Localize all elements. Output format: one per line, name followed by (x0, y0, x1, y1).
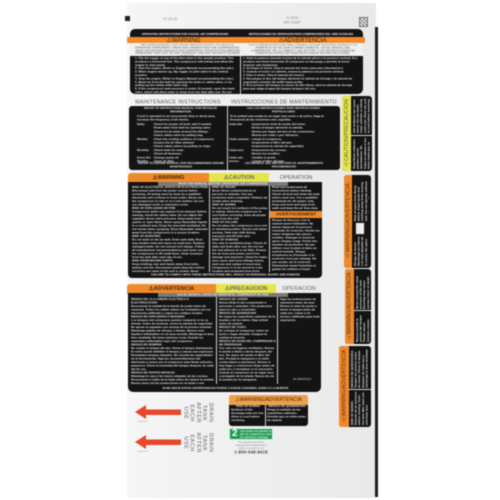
heading: instrucciones de mantenimiento: INSTRUCCIONES DE MANTENIMIENTO (231, 100, 337, 105)
operation header: OPERATION (280, 174, 312, 180)
drain text upper: TANK (202, 405, 208, 421)
column 2 text: Do not place the compressor on a roof or elevated position. Secure unit when moving. Tank may shift during transport and lift with care. (212, 224, 267, 238)
column 1 text: Disconnect unit from the power source before servicing. All wiring must be done by a qualified electrician and conform to local codes. Never use the compressor in rain or on a wet surface. Do not use damaged cords or extension cords. (132, 190, 204, 206)
arrow code lower: 34-0000721 (138, 450, 148, 452)
panel: risk of burns label (228, 394, 309, 427)
Spanish schedule labels: Cada mes: (229, 149, 244, 152)
column 2 text: RISK OF INJURY (212, 186, 236, 189)
column 1 text: RIESGO DE LA LLAMBRE ELECTRICA O ELECTROCUCION (131, 298, 189, 304)
Spanish schedule tasks: -Inspeccione las correas. (251, 149, 287, 152)
column 1 text: RIESGO DE EXPLOSION O INCENDIO (131, 316, 185, 318)
main panel body (128, 182, 322, 278)
column 1 text: Desconecte la unidad de la fuente de poder antes de repararla. Todos los cables deben ser instalados por un electricista calificado y segun los codigos locales. (131, 305, 210, 315)
Spanish maintenance footer: LEA MANUAL DEL MOTOR PARA EL MANTENIMIENTO RECOMENDADO (245, 162, 323, 168)
black backing frame (130, 29, 363, 94)
caution header (209, 173, 269, 183)
drain text upper: DRAIN (208, 403, 214, 423)
Spanish maintenance overview: Si la unidad esta usada en un lugar muy sucio o de polvo, haga la frecuencia de las revisiones mas seguidas. (230, 115, 324, 121)
column divider (268, 186, 271, 272)
badge number: 2 (232, 428, 238, 439)
barcode icon (359, 17, 368, 27)
drain text lower (183, 432, 214, 453)
English schedule tasks: -Check belts for wear. (153, 149, 184, 152)
divider between steps (239, 56, 242, 94)
precaucion header: ⚠PRECAUCION (225, 286, 267, 292)
English schedule tasks: -Check for air leaks around the fittings. (153, 130, 209, 133)
middle divider (354, 309, 371, 312)
caution strip (342, 96, 351, 171)
contact text: Use genuine replacement (236, 444, 266, 447)
badge text: Use motor oil specific to this air compressor only for warranty coverage (240, 430, 271, 439)
drain text lower: AFTER (195, 433, 201, 453)
label body (229, 395, 308, 426)
column 3 text: Siga las instrucciones de operacion antes de usar. Revise el nivel de aceite y drene el tanque antes de cada uso. Llame a un tecnico calificado para toda reparacion. (280, 298, 320, 322)
column 2 text: RIESGO DE DANO DEL COMPRESOR O DE PROPIEDAD (219, 340, 276, 346)
English schedule tasks: -Check safety valves by pulling on rings. (153, 145, 211, 148)
steps English: 4. Stop the engine. (Refer to Engine Manual recommending this info.) (135, 77, 234, 80)
caution header: ⚠CAUTION (224, 174, 254, 180)
caution divider (351, 134, 372, 137)
drain text lower: EACH (189, 434, 195, 452)
column 1 text: Do not weld on the air tank. Drain tank daily. Rust may weaken tank and cause an explosion. Replace damaged tanks. Do not exceed tool ratings. Follow all manufacturer recommendations and never use the compressor to fill small items. Drain moisture from the tank after each day of use. (132, 238, 205, 259)
panel top title: READ THE MANUAL BEFORE OPERATING AIR COMPRESSOR (178, 182, 268, 186)
heading: operating instructions English: OPERATING INSTRUCTIONS FOR GAS/OIL AIR COMPRESSORS (142, 33, 228, 36)
Spanish schedule labels (228, 122, 250, 163)
English maintenance overview: If unit is operated in an excessively dirty or dusty area, increase the frequency of all checks. (137, 115, 215, 121)
column 2 text (211, 185, 268, 273)
column 2 text: RIESGO DE LESION (219, 298, 248, 301)
Spanish schedule labels: Cada dia: (229, 123, 243, 126)
column 1 text: RISK OF EXPLOSION OR FIRE (132, 207, 176, 210)
avertissement band: AVERTISSEMENT (276, 212, 316, 217)
white warning section (130, 43, 363, 56)
orange strip (339, 346, 349, 427)
steps Spanish: 4. Pare el motor. (Vea el manual del motor.) (243, 74, 304, 77)
Spanish schedule tasks: -Drene el tanque abriendo la valvula. (251, 127, 303, 130)
orange strip (345, 269, 354, 344)
column 2 text: Nunca dirija el aire comprimido a personas o animales. Use proteccion para los ojos y respirador. (219, 302, 272, 312)
Spanish panel body (128, 293, 321, 392)
Spanish schedule tasks (250, 122, 316, 163)
English maintenance footer: REFER TO ENGINE MANUAL FOR RECOMMENDED ENGINE MAINTENANCE (138, 162, 224, 168)
panel footer: FAILURE TO COMPLY WITH THESE INSTRUCTIONS WILL RESULT IN PERSONAL INJURY AND DAMAGE (151, 274, 300, 276)
drain text upper (183, 402, 214, 423)
Spanish schedule tasks: -Limpie el compresor. (251, 138, 282, 141)
Spanish schedule tasks: -Cambie el aceite. (251, 156, 276, 159)
part number: 34-0000721A (293, 378, 311, 381)
panel: main warning Spanish (126, 283, 322, 393)
English schedule tasks: -Change pump oil. (153, 156, 179, 159)
print code left: 97-15-15 (163, 18, 177, 21)
warning title: ⚠WARNING/ADVERTENCIA (345, 183, 351, 260)
Spanish schedule tasks: -Inspeccione la valvula de seguridad. (251, 145, 304, 148)
panel footer: SI NO SIGUE ESTAS ADVERTENCIAS PUEDE CAUSAR LESIONES, DANO O LA MUERTE (162, 387, 289, 390)
contact text: For service and parts (238, 441, 264, 444)
drain text upper: AFTER (195, 403, 201, 423)
Spanish schedule labels: Cada seis (229, 156, 243, 159)
panel: maintenance (129, 106, 340, 170)
label orange header (229, 395, 308, 405)
English schedule tasks: -Inspect the air filter element. (153, 142, 195, 145)
precaucion header (216, 284, 276, 294)
warning band (127, 37, 365, 43)
English maintenance intro: REFER TO INSTRUCTION MANUAL FOR DETAILED INFORMATION (144, 107, 217, 113)
steps Spanish (242, 56, 358, 91)
English schedule tasks: -Clean the cooling surfaces of compressor. (153, 138, 215, 141)
Spanish maintenance intro: LEA LAS INSTRUCCIONES PARA INSTRUCCIONES PARTICULARES (247, 107, 320, 113)
column 1 text (131, 185, 208, 273)
column 1 text: No suelde el tanque del aire. Drene el tanque diariamente. El oxido puede debilitar el tanque y causar una explosion. Reemplace tanques danados. No exceda las capacidades de la herramienta. Siga las recomendaciones del fabricante y nunca use el compresor para llenar articulos pequenos. Drene la humedad del tanque despues de cada dia de uso. (131, 347, 214, 371)
arrow: lower drain (134, 434, 182, 450)
print code right (283, 16, 301, 24)
column 1 text: RIESGO DE ROMPER (131, 344, 162, 346)
English schedule labels (136, 122, 151, 163)
drain text lower: DRAIN (208, 433, 214, 453)
label orange header: ⚠WARNING/ADVERTENCIA (235, 397, 302, 402)
green certification badge (229, 428, 273, 440)
risk of burns text: Surfaces of the discharge tube are hot. Allow to cool before servicing. (231, 408, 264, 422)
heading: operating instructions Spanish: INSTRUCCIONES DE OPERACION PARA COMPRESORES DEL AIRE GASOLINA (249, 33, 353, 36)
panel top title: LEA EL MANUAL ANTES DE OPERAR EL COMPRESOR DE AIRE (177, 294, 269, 296)
warning title: ⚠WARNING/ADVERTENCIA (341, 350, 347, 423)
English schedule tasks: -Drain water from tank by opening valve. (153, 127, 211, 130)
steps English: 3. When engine warms up, flip toggle on pilot valve to the vertical position. (135, 71, 228, 77)
panel top title (158, 293, 288, 297)
English schedule tasks (152, 122, 215, 163)
column 2 text: RISK OF DAMAGE (212, 238, 238, 242)
column 2 text: RIESGO DE QUEMADURA (219, 312, 256, 315)
English schedule labels: Monthly: (137, 149, 150, 152)
maintenance divider (226, 106, 229, 170)
column 2 text: Use solo en lugares ventilados. Revise el aceite a diario y drene despues del uso. No opere sin aceite ni filtro del aire. Proteja la manguera y el cable contra danos y pinchazos. Revise si hay fugas y conexiones flojas antes de cada uso y reemplace si es necesario. Guarde el compresor en un lugar seco y protegido de la helada. Nunca tire de la unidad por la manguera. (219, 347, 275, 382)
English schedule labels: Weekly: (137, 138, 148, 141)
column 2 text: RIESGO DE CAIDA (219, 326, 246, 329)
English schedule tasks: -Check for proper oil level, add if needed. (153, 123, 212, 126)
steps Spanish: 5. Descargue el aire del tanque abriendo la valvula de drenaje o la valvula de seguridad y tirando del anillo hacia arriba. (243, 77, 352, 84)
side label: warning advertencia lower (339, 346, 371, 427)
column 1 text (130, 297, 214, 385)
column divider (215, 297, 218, 384)
steps English: 5. Bleed air from the tank by opening the drain or safety valve, or by pulling up the safety relief valve ring. (135, 81, 232, 87)
side label: caution precaucion (342, 96, 372, 171)
English schedule tasks: -Check safety valve by pulling ring. (153, 134, 203, 137)
arrow code upper: 34-0000721 (138, 420, 148, 422)
English schedule labels: Daily: (137, 123, 145, 126)
riesgo text: Tenga el cuidado de las superficies calientes. Permita que se enfrie antes de reparar. (267, 408, 306, 422)
column 1 text: RISK OF BURSTING (132, 235, 161, 238)
drain text lower: USE (183, 437, 189, 449)
Spanish schedule tasks: -Inspeccione el filtro del aire. (251, 142, 292, 145)
steps English: 2. Start the engine. (Refer to Engine Manual recommending this info.) (135, 67, 234, 70)
contact text (235, 440, 267, 450)
column 2 text: RISK OF FALLING (212, 221, 238, 224)
steps English: 1. Flip the toggle on top of the pilot valve to the upright position. This produces a horizontal line. The compressor will unload and allow the engine to start easier. (135, 57, 234, 67)
column 2 text: RISK OF BURNS (212, 204, 236, 206)
paper sheet background (127, 3, 376, 498)
column 1 text: RIESGO DE PARTES MOVILES (131, 372, 175, 374)
column 1 text: RISK OF ELECTRICAL SHOCK OR ELECTROCUTION (132, 186, 208, 189)
side label: warning advertencia middle (345, 269, 371, 344)
column 1 text: Los tanques del compresor pueden romperse si no se drenan. Antes de arrancar, revise la valvula de seguridad. No ajuste el regulador por encima de la presion nominal. Mantenga alejado de chispas o llamas. Nunca rocie liquidos inflamables en un area cerrada. Mantenga el area bien ventilada. No fume mientras rocia. Guarde los materiales inflamables lejos del compresor. (131, 319, 213, 343)
steps Spanish: 1. Suba la palanca ubicada encima de la valvula piloto a la posicion vertical. Eso produce una linea horizontal. El compresor se descarga y permite al motor arrancar mas facilmente. (243, 57, 358, 67)
drain text lower: TANK (202, 435, 208, 451)
panel top title (158, 182, 288, 186)
panel: operating instructions (126, 28, 366, 95)
steps Spanish: 3. Cuando el motor se caliente, mueva la palanca a la posicion vertical. (243, 71, 344, 74)
column divider (276, 297, 279, 384)
heading: maintenance instructions: MAINTENANCE INSTRUCTIONS (135, 100, 221, 105)
column 2 text: No toque las superficies calientes de la bomba o de los tubos. Deje enfriar antes de reparar. (219, 316, 275, 326)
advertencia header (127, 284, 216, 294)
right black edge strip (375, 27, 378, 497)
phone number: 1-800-548-8418 (234, 450, 268, 454)
print code right: AIR COMP (283, 21, 301, 24)
column 3 lower text: Risque de blessure. Lire le manuel avant l'utilisation. Ne jamais depasser la pression nominale du reservoir. Garder les mains eloignees des pieces mobiles. Vidanger le reservoir apres chaque usage. Porter des lunettes de protection. Ne pas utiliser sous la pluie ni dans un endroit humide. Risque d'explosion et d'incendie si le reservoir n'est pas vidange. Ne pas souder sur le reservoir. Debrancher avant l'entretien et garder les enfants a l'ecart. (272, 219, 320, 271)
side label: warning advertencia upper (344, 175, 371, 268)
label divider (264, 405, 267, 426)
icon: belt hazard (355, 222, 365, 235)
steps Spanish: 2. Arranque el motor. (Vea el manual del motor para mas informacion.) (243, 67, 343, 70)
warning header (128, 173, 209, 183)
column 2 text: Never direct compressed air at persons or animals. Use eye protection and a respirator. Release air slowly when draining. (212, 190, 268, 203)
column 2 text: No coloque el compresor sobre un techo o lugar elevado. Asegure la unidad al moverla. (219, 330, 269, 340)
registration mark (125, 16, 130, 21)
column 3 upper text: Read and understand all instructions before starting. Check oil level and drain the tank before each use. Use a qualified technician for all repairs only. Keep unit level and away from walls and keep the air flow clear. (272, 186, 320, 210)
English schedule tasks: -Check all fasteners. (153, 153, 182, 156)
Spanish schedule tasks: -Inspeccione nivel de aceite del motor. (251, 123, 306, 126)
column divider (208, 186, 211, 272)
column 2 text: Do not touch hot surfaces of the pump or tubing. Allow the compressor to cool before servicing. Keep all people away from the unit. (212, 207, 267, 220)
Spanish schedule tasks: -Revise los tornillos. (251, 153, 280, 156)
panel: main warning English (127, 172, 323, 279)
contact text: parts or contact us at (238, 447, 264, 450)
advertencia header: ⚠ADVERTENCIA (149, 286, 194, 292)
warning text: RIESGO DE QUEMADURA. Tanque sin presion antes de mover. Drene el tanque despues de cada uso y mantenga el area ventilada. (351, 349, 368, 388)
column 2 text: Use only in ventilated areas. Check oil daily and drain after use. Do not run the unit without oil or air filter. Protect the air hose and power cord from damage and puncture. Check for leaks, worn spots and loose fittings before each use and replace if necessary. (212, 242, 268, 266)
column 1 text: RISK FROM MOVING PARTS (132, 260, 173, 262)
warning header: ⚠WARNING (152, 174, 185, 180)
Spanish schedule labels: Cada semana: (229, 138, 249, 141)
risk of burns text: RISK OF BURNS (236, 405, 260, 408)
avertissement band (270, 211, 322, 218)
drain text upper: USE (183, 407, 189, 419)
Spanish schedule tasks: -Revise por fugas del aire en las conexiones. (251, 130, 315, 133)
drain text upper: EACH (189, 404, 195, 422)
column 1 text: Compressor tanks can rupture if not drained. Before starting, check the safety valve. Do not adjust the regulator above rated pressure. Keep away from sparks or open flame. Never spray flammable liquids in a confined area. Keep the area well ventilated. Do not smoke when spraying. Store flammable materials away from the compressor in a secure location. (132, 210, 208, 234)
English schedule labels: Every Six (137, 156, 151, 159)
warning title: ⚠WARNING/ADVERTENCIA (346, 273, 352, 340)
steps English (134, 56, 236, 94)
steps Spanish: 6. Si la presion del tanque es menor de diez libras, abra la valvula de drenaje para que salga el agua del tanque despues del uso. (243, 84, 352, 91)
Spanish schedule tasks: -Revise por ruido o por vibracion. (251, 134, 299, 137)
caution title: ⚠CAUTION/PRECAUCION (344, 99, 350, 168)
lower divider (349, 388, 371, 391)
orange strip (344, 175, 352, 268)
column 2 text (218, 297, 276, 382)
operacion header: OPERACION (282, 286, 316, 292)
riesgo text: RIESGO DE QUEMADURA (268, 405, 306, 408)
print code right: 71 0078 (286, 16, 298, 20)
arrow: upper drain (134, 404, 182, 420)
